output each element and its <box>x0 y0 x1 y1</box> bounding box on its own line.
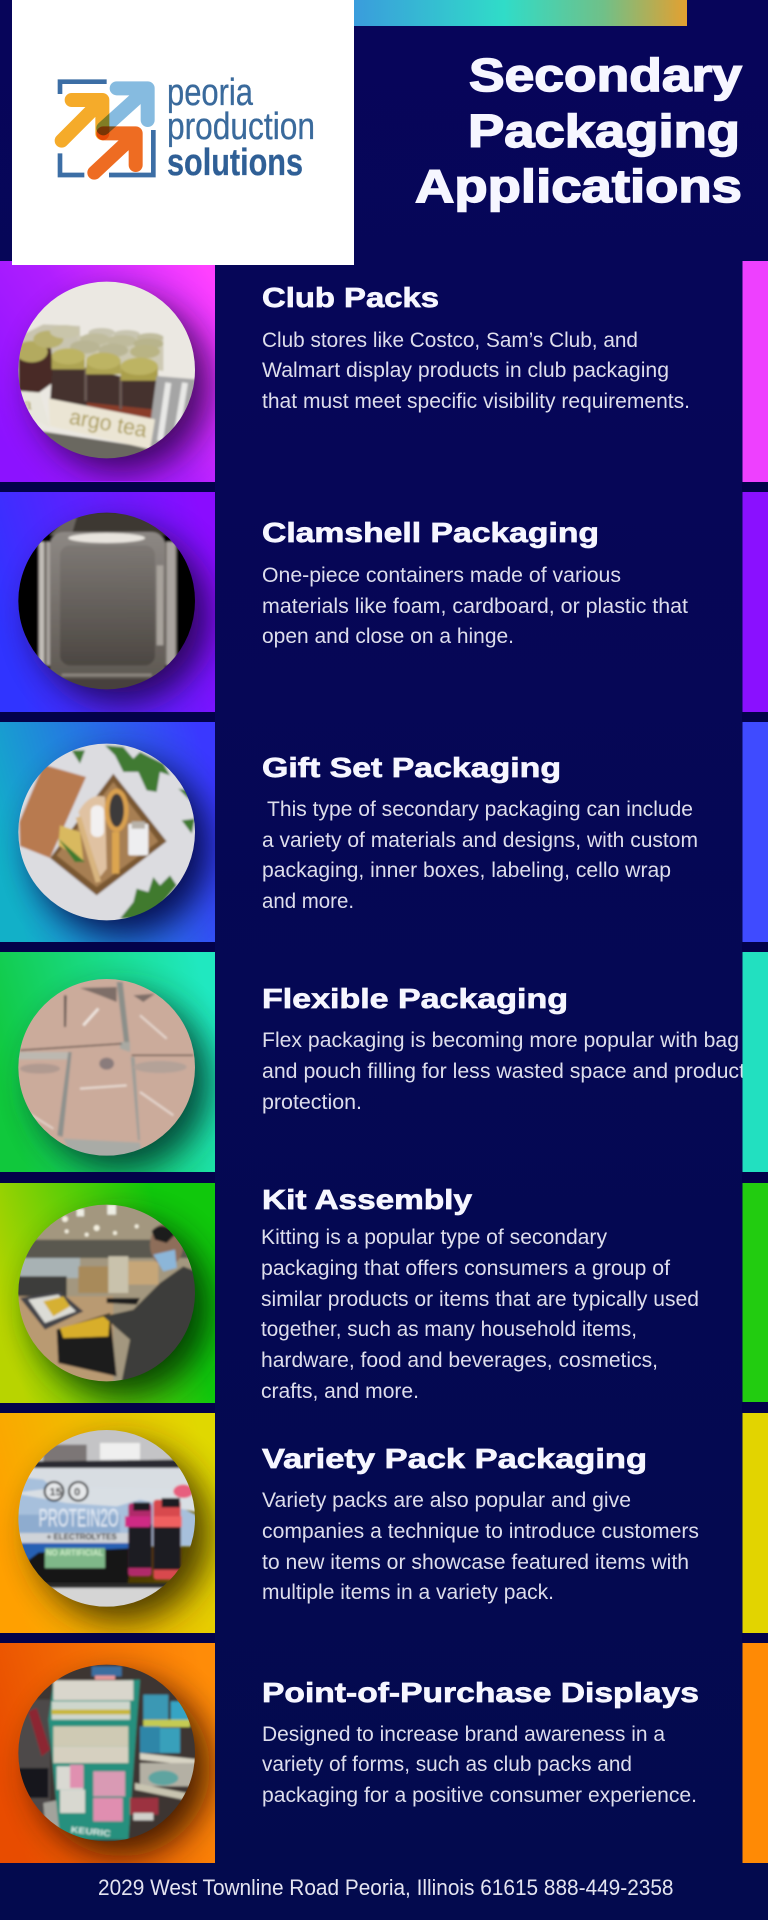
text block: variety pack packaging: multiple items in a variety pack. <box>262 1581 554 1604</box>
text block: point-of-purchase displays: Designed to increase brand awareness in a <box>262 1723 665 1746</box>
text block: point-of-purchase displays: packaging for a positive consumer experience. <box>262 1784 697 1807</box>
text block: gift set packaging: This type of secondary packaging can include <box>267 798 693 821</box>
text block: gift set packaging: and more. <box>262 890 354 913</box>
photo: Protein2O variety pack: + ELECTROLYTES <box>47 1532 117 1542</box>
photo: gift box <box>18 744 195 920</box>
panel: flexible packaging image <box>0 952 215 1172</box>
photo: worker at kitting station <box>18 1204 195 1382</box>
text block: club packs: Walmart display products in club packaging <box>262 359 669 382</box>
text block: flexible packaging: Flex packaging is becoming more popular with bag <box>262 1029 739 1052</box>
text block: gift set packaging: packaging, inner boxes, labeling, cello wrap <box>262 859 671 882</box>
text block: flexible packaging: protection. <box>262 1091 362 1114</box>
panel: gift set image <box>0 722 215 942</box>
text block: club packs <box>262 329 690 413</box>
footer: address and phone: 2029 West Townline Road Peoria, Illinois 61615 888-449-2358 <box>98 1875 674 1900</box>
text block: kit assembly: packaging that offers consumers a group of <box>261 1257 670 1280</box>
text block: point-of-purchase displays: variety of forms, such as club packs and <box>262 1753 632 1776</box>
text block: kit assembly: crafts, and more. <box>261 1380 419 1403</box>
photo: Keurig display: KEURIC <box>70 1824 112 1839</box>
photo: clamshell tray <box>18 512 195 690</box>
text block: kit assembly: Kitting is a popular type of secondary <box>261 1226 607 1249</box>
panel: point-of-purchase image <box>0 1643 215 1863</box>
logo wordmark: peoria <box>167 72 254 114</box>
right colour strips <box>742 261 768 1863</box>
logo wordmark: solutions <box>167 142 303 184</box>
text block: clamshell packaging: materials like foam, cardboard, or plastic that <box>262 595 688 618</box>
text block: flexible packaging <box>262 1029 745 1114</box>
heading: club packs: Club Packs <box>262 282 439 313</box>
panel: kit assembly image <box>0 1183 215 1403</box>
text block: kit assembly <box>261 1226 699 1403</box>
photo: Protein2O variety pack: 15 <box>49 1487 62 1499</box>
logo wordmark <box>167 72 315 184</box>
text block: variety pack packaging <box>262 1489 699 1604</box>
text block: kit assembly: hardware, food and beverages, cosmetics, <box>261 1349 658 1372</box>
text block: variety pack packaging: to new items or showcase featured items with <box>262 1551 689 1574</box>
text block: clamshell packaging: open and close on a hinge. <box>262 625 514 648</box>
logo panel: Peoria Production Solutions <box>12 0 354 265</box>
text block: club packs: Club stores like Costco, Sam’s Club, and <box>262 329 638 352</box>
text block: clamshell packaging <box>262 564 688 648</box>
text block: club packs: that must meet specific visibility requirements. <box>262 390 690 413</box>
text block: clamshell packaging: One-piece containers made of various <box>262 564 621 587</box>
logo wordmark: production <box>167 106 315 148</box>
text block: gift set packaging: a variety of materials and designs, with custom <box>262 829 698 852</box>
text block: gift set packaging <box>262 798 698 913</box>
text block: variety pack packaging: Variety packs are also popular and give <box>262 1489 631 1512</box>
panel: club packs image <box>0 261 215 482</box>
gradient bar: top accent <box>354 0 687 26</box>
icon: logo arrows in square frame <box>60 82 153 175</box>
text block: point-of-purchase displays <box>262 1723 697 1807</box>
photo: Protein2O variety pack: PROTEIN2O <box>39 1504 119 1532</box>
heading: variety pack packaging: Variety Pack Packaging <box>262 1443 647 1474</box>
photo: Protein2O variety pack: NO ARTIFICIAL <box>46 1549 103 1558</box>
heading: gift set packaging: Gift Set Packaging <box>262 752 561 783</box>
photo: Protein2O variety pack <box>18 1430 195 1607</box>
photo: argo tea club pack: argo tea <box>67 404 150 442</box>
title <box>415 49 742 212</box>
text block: kit assembly: together, such as many household items, <box>261 1318 637 1341</box>
heading: point-of-purchase displays: Point-of-Purchase Displays <box>262 1677 699 1708</box>
title: Applications <box>415 160 742 212</box>
photo: argo tea club pack: a <box>23 397 32 413</box>
photo: Keurig display <box>18 1664 195 1842</box>
title: Secondary <box>469 49 742 101</box>
photo: Protein2O variety pack: 0 <box>74 1487 80 1499</box>
text block: flexible packaging: and pouch filling for less wasted space and product <box>262 1060 745 1083</box>
photo: argo tea club pack <box>18 282 195 458</box>
heading: clamshell packaging: Clamshell Packaging <box>262 517 599 548</box>
text block: kit assembly: similar products or items that are typically used <box>261 1288 699 1311</box>
heading: flexible packaging: Flexible Packaging <box>262 983 568 1014</box>
panel: clamshell image <box>0 492 215 712</box>
heading: kit assembly: Kit Assembly <box>262 1184 473 1215</box>
text block: variety pack packaging: companies a technique to introduce customers <box>262 1520 699 1543</box>
panel: variety pack image <box>0 1413 215 1633</box>
photo: flexible pouches <box>18 979 195 1156</box>
title: Packaging <box>468 105 740 157</box>
